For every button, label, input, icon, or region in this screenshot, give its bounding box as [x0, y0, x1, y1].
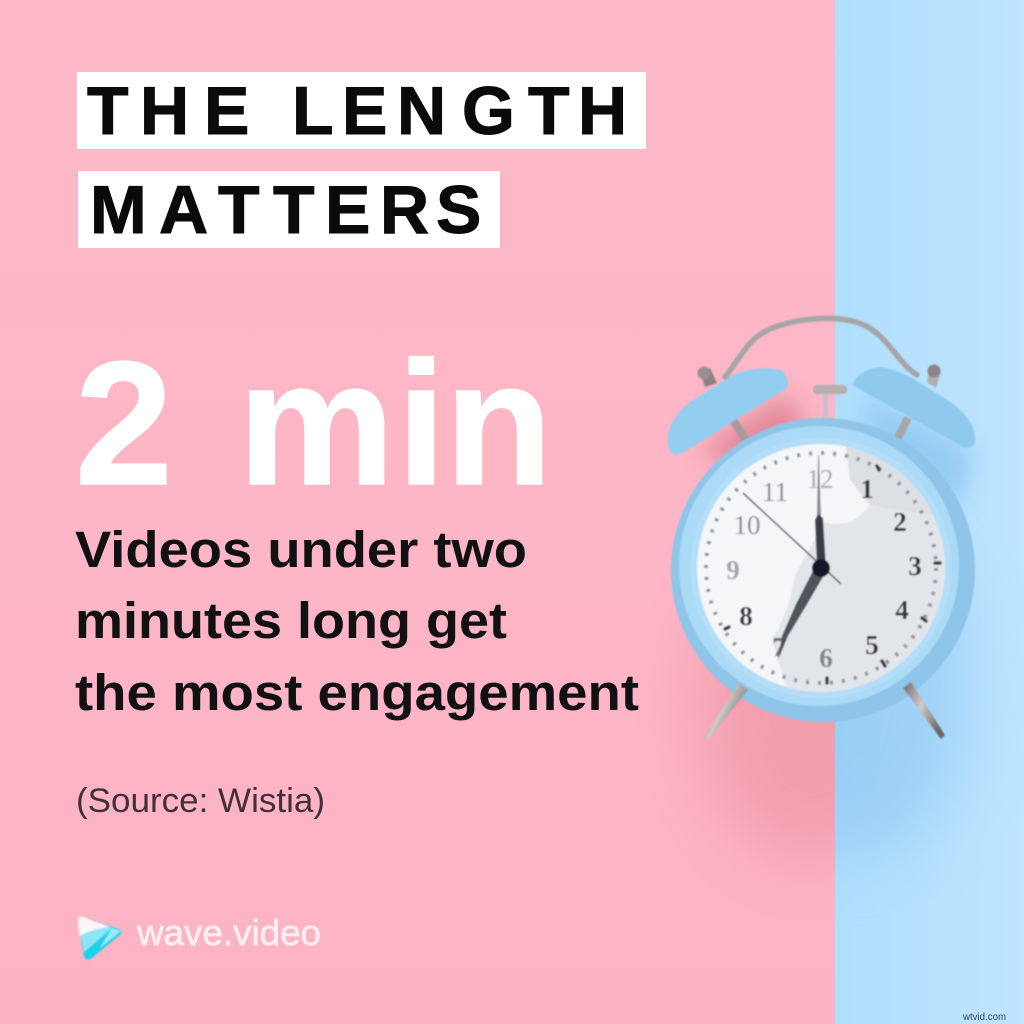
- clock numerals: 10: [734, 510, 760, 540]
- clock numerals: 4: [895, 595, 909, 625]
- description text: the most engagement: [75, 664, 639, 721]
- title: the length matters: [77, 72, 646, 248]
- clock numerals: 6: [819, 643, 833, 673]
- icon: play triangle: [78, 916, 121, 960]
- clock numerals: [726, 464, 922, 673]
- alarm clock: [668, 318, 975, 740]
- brand logo: wave.video: [78, 912, 321, 960]
- left bell: [668, 368, 788, 454]
- clock face: [697, 440, 960, 700]
- clock numerals: 7: [772, 632, 786, 662]
- center striker: [813, 385, 847, 422]
- description text: Videos under two: [75, 521, 527, 578]
- title line two: MATTERS: [90, 172, 481, 248]
- minute ticks: [706, 453, 936, 683]
- shadow on pink panel: [689, 391, 835, 866]
- clock numerals: 9: [726, 555, 740, 585]
- clock numerals: 3: [908, 551, 922, 581]
- right bell: [852, 367, 975, 448]
- bell posts: [733, 418, 908, 447]
- hour ticks: [725, 466, 940, 683]
- clock hands: [743, 455, 841, 660]
- clock numerals: 8: [739, 601, 753, 631]
- clock numerals: 5: [865, 630, 879, 660]
- source note: (Source: Wistia): [76, 782, 325, 820]
- clock body: [671, 418, 975, 722]
- big statistic: 2 min: 2 min: [75, 326, 553, 522]
- clock numerals: 1: [860, 474, 874, 504]
- right bell knob: [927, 364, 941, 388]
- brand name: wave.video: [136, 912, 321, 953]
- clock numerals: 2: [893, 507, 907, 537]
- left bell knob: [698, 366, 717, 387]
- shadow on blue panel: [835, 398, 984, 864]
- clock numerals: 11: [762, 477, 788, 507]
- description text: [75, 521, 639, 721]
- left leg: [704, 683, 748, 740]
- blue background panel: [835, 0, 1024, 1024]
- clock numerals: 12: [806, 464, 834, 494]
- watermark: wtvid.com: [962, 1012, 1006, 1023]
- title line one: THE LENGTH: [87, 73, 627, 149]
- right leg: [903, 682, 945, 739]
- bell handle: [725, 318, 917, 377]
- description text: minutes long get: [75, 592, 507, 649]
